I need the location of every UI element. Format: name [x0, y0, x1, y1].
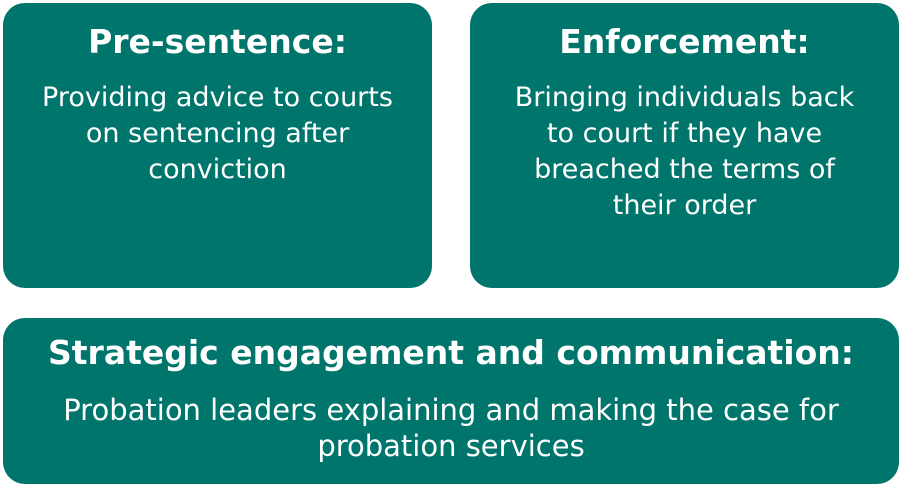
- text: pre-sentence description: on sentencing after: [86, 118, 349, 149]
- text: enforcement description: breached the terms of: [534, 154, 835, 185]
- text: enforcement description: their order: [613, 190, 756, 221]
- heading: enforcement: Enforcement:: [559, 22, 810, 61]
- text: pre-sentence description: [42, 82, 393, 185]
- text: enforcement description: to court if they have: [547, 118, 822, 149]
- text: strategic engagement description: Probation leaders explaining and making the case for: [63, 393, 839, 427]
- heading: strategic engagement: Strategic engagement and communication:: [48, 333, 854, 372]
- text: strategic engagement description: probation services: [317, 429, 585, 463]
- panel: enforcement: [470, 3, 899, 288]
- panel: strategic engagement: [3, 318, 899, 484]
- text: enforcement description: [515, 82, 854, 221]
- text: pre-sentence description: Providing advice to courts: [42, 82, 393, 113]
- panel: pre-sentence: [3, 3, 432, 288]
- text: pre-sentence description: conviction: [148, 154, 287, 185]
- heading: pre-sentence: Pre-sentence:: [88, 22, 347, 61]
- text: enforcement description: Bringing individuals back: [515, 82, 854, 113]
- text: strategic engagement description: [63, 393, 839, 463]
